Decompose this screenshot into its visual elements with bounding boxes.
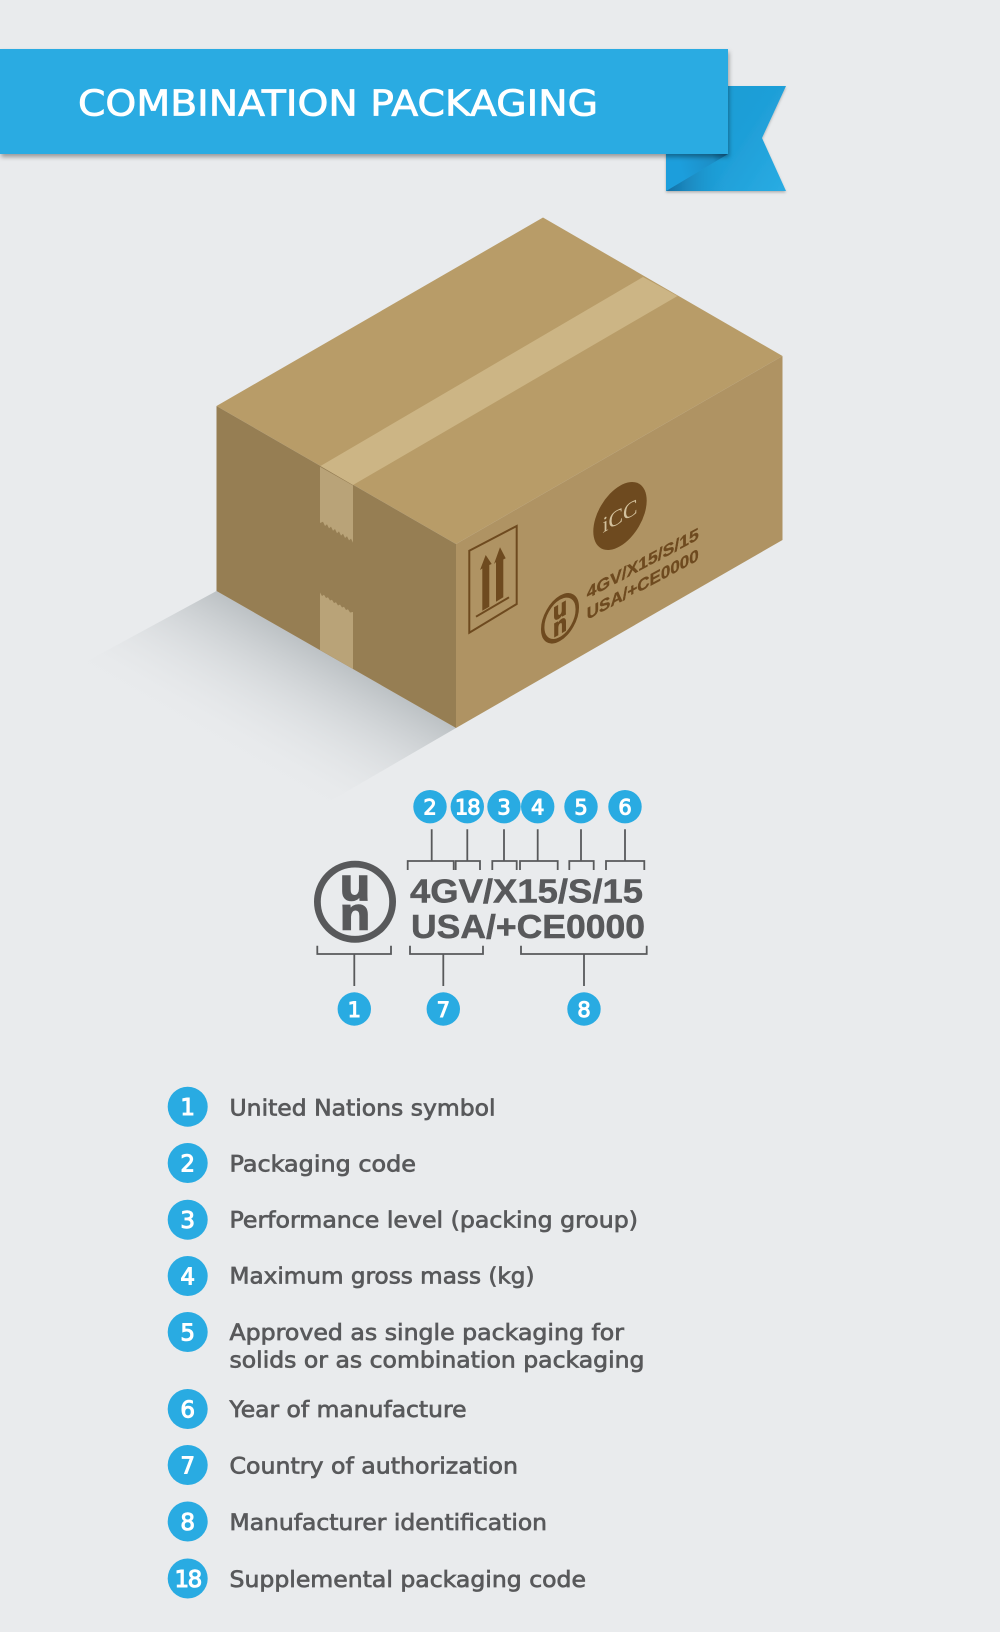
callout badge 4: 4 bbox=[531, 796, 544, 820]
UN marking diagram bbox=[317, 790, 647, 1026]
ribbon band bbox=[0, 49, 728, 154]
upper tape flap bbox=[320, 467, 353, 543]
legend item 3: Performance level (packing group) bbox=[230, 1208, 638, 1234]
title text: COMBINATION PACKAGING bbox=[78, 84, 598, 124]
callout badge 6 bbox=[608, 790, 642, 823]
callout badge 18 bbox=[451, 790, 484, 823]
legend item 8: Manufacturer identification bbox=[230, 1511, 547, 1536]
box right face bbox=[456, 356, 782, 728]
legend item 18: 18 bbox=[175, 1567, 202, 1593]
box left face bbox=[216, 406, 456, 728]
callout badge 3: 3 bbox=[497, 796, 511, 820]
legend item 2: 2 bbox=[180, 1151, 195, 1177]
callout badge 5: 5 bbox=[574, 796, 588, 820]
legend item 3: 3 bbox=[180, 1208, 195, 1234]
bracket lines bbox=[317, 829, 647, 986]
legend list bbox=[168, 1087, 644, 1598]
callout badge 5 bbox=[564, 790, 598, 823]
ribbon tail bbox=[666, 86, 786, 191]
callout badge 7: 7 bbox=[437, 998, 450, 1022]
title ribbon bbox=[0, 49, 786, 191]
callout badge 8 bbox=[567, 992, 601, 1026]
UN symbol on box: u bbox=[553, 592, 567, 627]
UN symbol: u bbox=[340, 859, 370, 910]
legend item 6: Year of manufacture bbox=[228, 1398, 466, 1423]
legend item 8: 8 bbox=[180, 1510, 195, 1536]
legend item 5 bbox=[168, 1312, 644, 1374]
legend item 18 bbox=[168, 1558, 586, 1598]
legend item 1 bbox=[168, 1087, 495, 1127]
box top face bbox=[216, 218, 782, 544]
UN marking text on box: 4GV/X15/S/15 bbox=[587, 524, 699, 603]
legend item 4: Maximum gross mass (kg) bbox=[230, 1265, 534, 1290]
UN symbol on box bbox=[543, 586, 577, 650]
lower tape flap bbox=[320, 592, 353, 669]
UN symbol: n bbox=[340, 889, 370, 940]
callout badge 7 bbox=[427, 992, 460, 1026]
box ground shadow bbox=[80, 591, 456, 807]
legend item 5: 5 bbox=[180, 1320, 195, 1346]
UN marking text on box: USA/+CE0000 bbox=[587, 545, 699, 624]
legend item 3 bbox=[168, 1200, 638, 1240]
legend item 1: 1 bbox=[180, 1095, 195, 1121]
legend item 5: Approved as single packaging for bbox=[230, 1321, 625, 1346]
legend item 4 bbox=[168, 1256, 534, 1296]
callout badge 6: 6 bbox=[618, 796, 632, 820]
callout badge 1: 1 bbox=[348, 998, 361, 1022]
legend item 7 bbox=[168, 1445, 518, 1485]
UN symbol on box: n bbox=[553, 608, 567, 644]
callout badge 1 bbox=[338, 992, 371, 1026]
callout badge 18: 18 bbox=[455, 796, 480, 820]
legend item 8 bbox=[168, 1502, 547, 1542]
marking code text: 4GV/X15/S/15 bbox=[410, 874, 643, 911]
iCC badge: iCC bbox=[602, 494, 638, 539]
legend item 18: Supplemental packaging code bbox=[230, 1568, 586, 1593]
callout badge 8: 8 bbox=[577, 998, 591, 1022]
callout badge 2 bbox=[413, 790, 447, 823]
callout badge 2: 2 bbox=[423, 796, 437, 820]
legend item 2: Packaging code bbox=[230, 1152, 416, 1177]
legend item 2 bbox=[168, 1143, 416, 1183]
legend item 6: 6 bbox=[180, 1397, 195, 1423]
this-way-up arrows icon bbox=[469, 526, 517, 633]
legend item 4: 4 bbox=[180, 1264, 195, 1290]
tape on top bbox=[320, 277, 678, 485]
callout badge 4 bbox=[521, 790, 554, 823]
marking code text: USA/+CE0000 bbox=[411, 909, 645, 946]
marking code text bbox=[410, 874, 645, 946]
legend item 6 bbox=[168, 1389, 466, 1429]
legend item 7: 7 bbox=[180, 1453, 195, 1479]
legend item 7: Country of authorization bbox=[230, 1454, 518, 1480]
UN symbol bbox=[317, 859, 393, 940]
legend item 1: United Nations symbol bbox=[230, 1096, 496, 1122]
cardboard box bbox=[216, 218, 782, 728]
callout badge 3 bbox=[487, 790, 521, 823]
iCC badge bbox=[593, 470, 647, 562]
legend item 5: solids or as combination packaging bbox=[230, 1348, 644, 1374]
